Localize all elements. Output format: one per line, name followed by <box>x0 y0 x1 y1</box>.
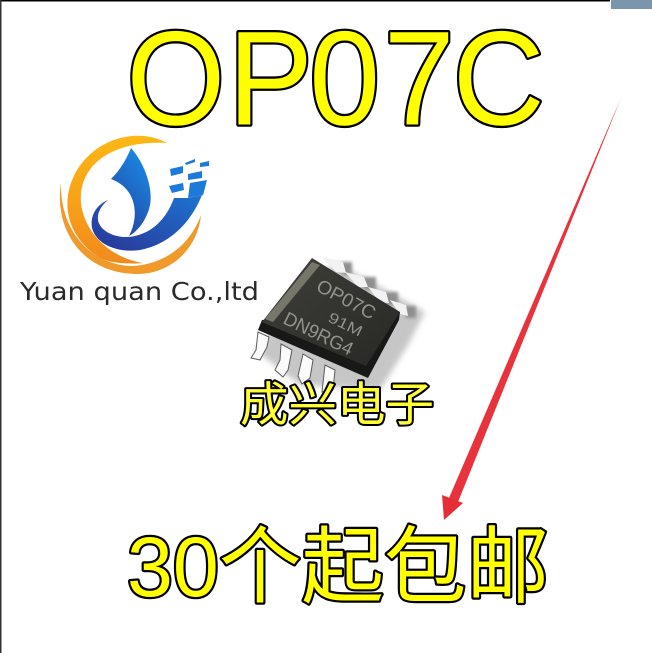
chip marking text: OP07C <box>313 276 379 324</box>
icon: SOP-8 chip <box>251 257 425 392</box>
chip marking text <box>280 276 379 361</box>
logo blue wave <box>92 180 207 251</box>
logo lower orange swoosh <box>60 183 201 274</box>
chip soft shadow <box>255 262 425 390</box>
red arrow <box>442 98 621 520</box>
logo gold crescent <box>67 136 167 263</box>
chip side <box>258 312 400 378</box>
logo pixel squares <box>169 159 209 198</box>
chip bottom pins <box>251 332 335 392</box>
icon: company logo <box>60 136 209 274</box>
shipping notice: 30个起包邮 <box>127 520 549 614</box>
chip pin-1 stripe <box>265 262 320 322</box>
chip top pins <box>322 257 408 316</box>
logo blue drop <box>111 148 151 236</box>
chip body <box>262 258 400 366</box>
shop label: 成兴电子 <box>240 378 434 431</box>
chip top pin shadows <box>340 262 416 318</box>
company name: Yuan quan Co.,ltd <box>19 277 259 306</box>
title: OP07C <box>126 4 545 153</box>
chip marking text: DN9RG4 <box>280 309 357 361</box>
chip marking text: 91M <box>325 309 365 340</box>
